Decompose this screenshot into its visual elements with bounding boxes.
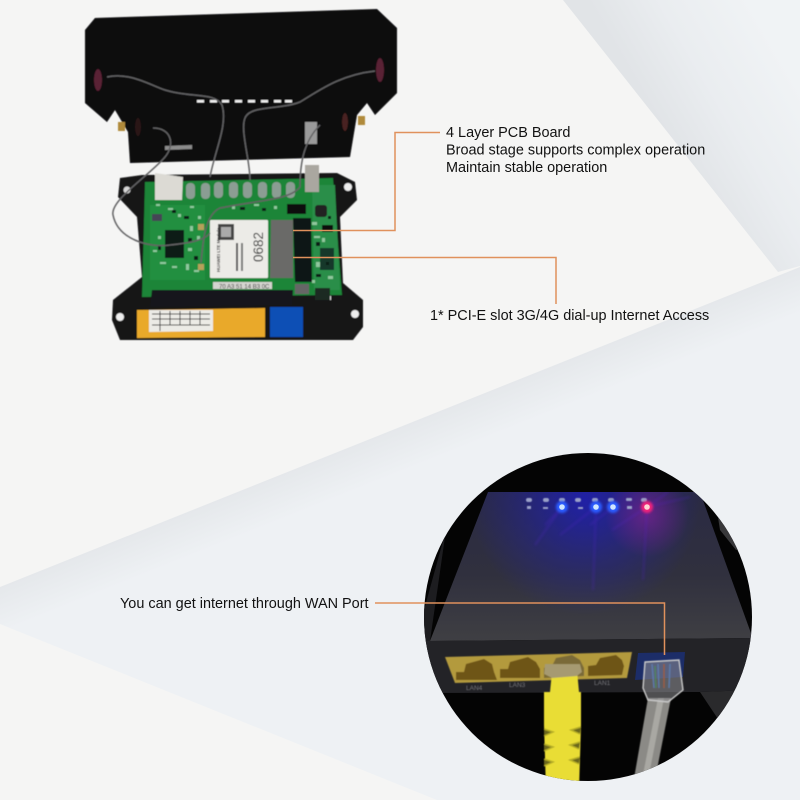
text block: PCB features: 4 Layer PCB Board [446, 125, 570, 141]
text block: PCB features: Broad stage supports complex operation [446, 142, 705, 158]
CPU chip [165, 230, 184, 258]
capacitors [186, 182, 295, 199]
status LEDs [526, 498, 653, 513]
leader line: WAN port [375, 603, 664, 655]
yellow cable [544, 664, 582, 790]
left side strip [424, 530, 446, 641]
LTE module: 0682 [251, 232, 266, 262]
text: WAN port: You can get internet through WAN Port [120, 596, 369, 612]
MAC label: 70 A3 51 14 B3 0C [219, 284, 270, 290]
lid [85, 9, 397, 163]
base bracket [112, 173, 363, 340]
white label [149, 310, 213, 332]
text block: PCB features [446, 125, 705, 176]
photo: router PCB with open lid [85, 9, 397, 340]
LAN ports panel: LAN3 [509, 682, 526, 689]
orange battery [137, 308, 265, 338]
RF connector [305, 165, 319, 192]
dark battery band [150, 290, 293, 307]
blue capacitor [270, 307, 303, 337]
LTE module [210, 220, 268, 278]
WAN port [635, 652, 685, 680]
LAN ports panel [445, 652, 632, 692]
LTE module: HUAWEI LTE Module [216, 227, 221, 272]
MAC label [213, 282, 272, 290]
gray cable [634, 698, 671, 774]
router top face [430, 492, 752, 641]
green PCB [142, 178, 342, 300]
LED glow [480, 492, 692, 605]
right side equipment [718, 516, 738, 550]
leader line: PCI-E slot [293, 258, 556, 304]
RJ45 clear plug [643, 660, 683, 702]
circular photo: router with LEDs and cables [424, 453, 752, 790]
metal slot shield [270, 220, 293, 278]
SD card holder [155, 173, 183, 200]
antenna wires [107, 71, 375, 263]
text: PCI-E slot: 1* PCI-E slot 3G/4G dial-up Internet Access [430, 308, 709, 324]
right side cable [700, 690, 734, 718]
leader line: PCB board [293, 132, 440, 230]
text block: PCB features: Maintain stable operation [446, 160, 607, 176]
front panel [424, 638, 752, 693]
PCI-E connector [293, 218, 312, 282]
LAN ports panel: LAN4 [466, 685, 483, 692]
LAN ports panel: LAN1 [594, 680, 611, 687]
